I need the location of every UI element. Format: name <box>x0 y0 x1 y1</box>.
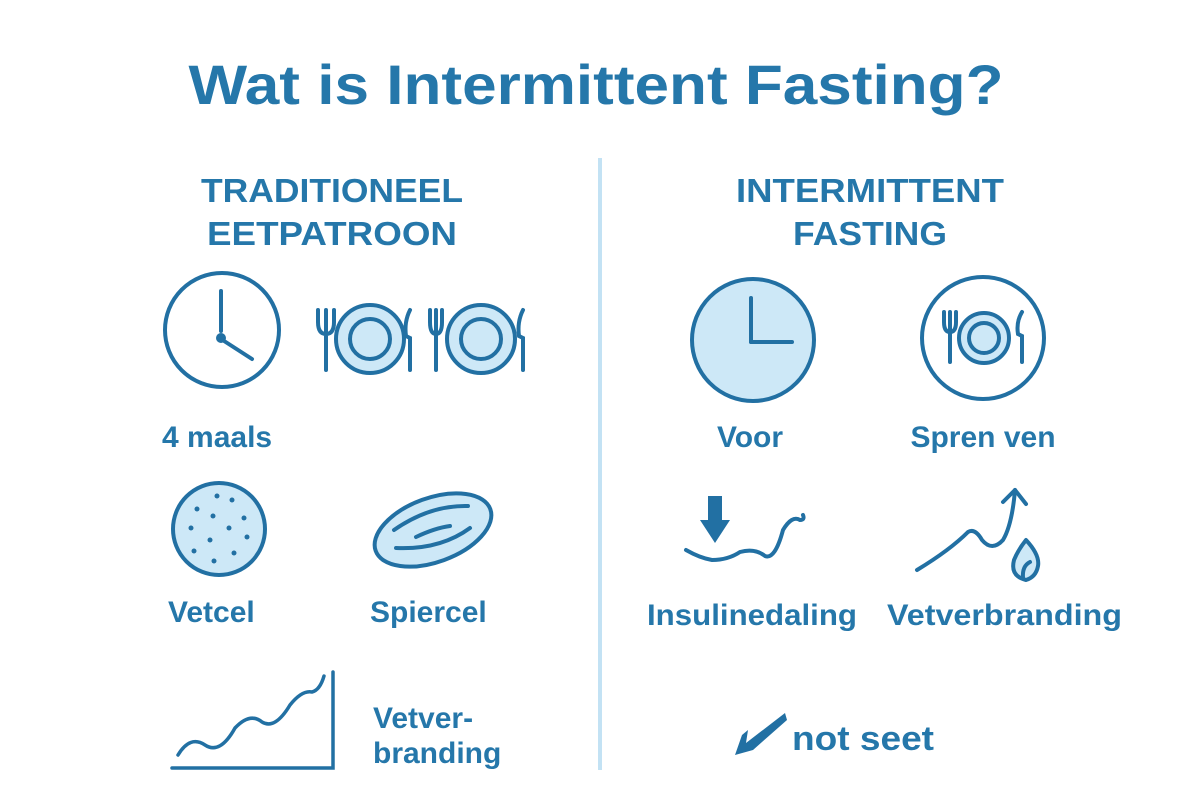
icon: insulin drop <box>686 496 804 560</box>
heading: intermittent fasting <box>736 172 1004 252</box>
label: not seet: not seet <box>792 720 934 758</box>
chart: fat burning traditional <box>172 672 333 768</box>
icon: plates <box>318 305 523 373</box>
icon: plate right <box>922 277 1044 399</box>
label: vetverbranding left: Vetver- <box>373 702 473 735</box>
title: Wat is Intermittent Fasting? <box>188 53 1004 116</box>
icon: spiercel <box>365 479 501 581</box>
label: vetverbranding right: Vetverbranding <box>887 599 1122 632</box>
label: voor: Voor <box>717 421 783 454</box>
label: spren ven: Spren ven <box>910 421 1056 454</box>
heading: traditioneel: EETPATROON <box>207 215 457 252</box>
heading: traditioneel: TRADITIONEEL <box>201 172 463 209</box>
label: insulinedaling: Insulinedaling <box>647 599 857 632</box>
heading: intermittent fasting: FASTING <box>793 215 947 252</box>
icon: clock left <box>165 273 279 387</box>
label: vetverbranding left: branding <box>373 737 501 770</box>
icon: clock right <box>692 279 814 401</box>
icon: check arrow <box>735 713 787 755</box>
label: vetcel: Vetcel <box>168 596 255 629</box>
label: spiercel: Spiercel <box>370 596 487 629</box>
heading: intermittent fasting: INTERMITTENT <box>736 172 1004 209</box>
label: 4 maals: 4 maals <box>162 421 272 454</box>
icon: fat burn up <box>917 490 1038 580</box>
icon: vetcel <box>173 483 265 575</box>
heading: traditioneel <box>201 172 463 252</box>
label: vetverbranding left <box>373 702 501 770</box>
